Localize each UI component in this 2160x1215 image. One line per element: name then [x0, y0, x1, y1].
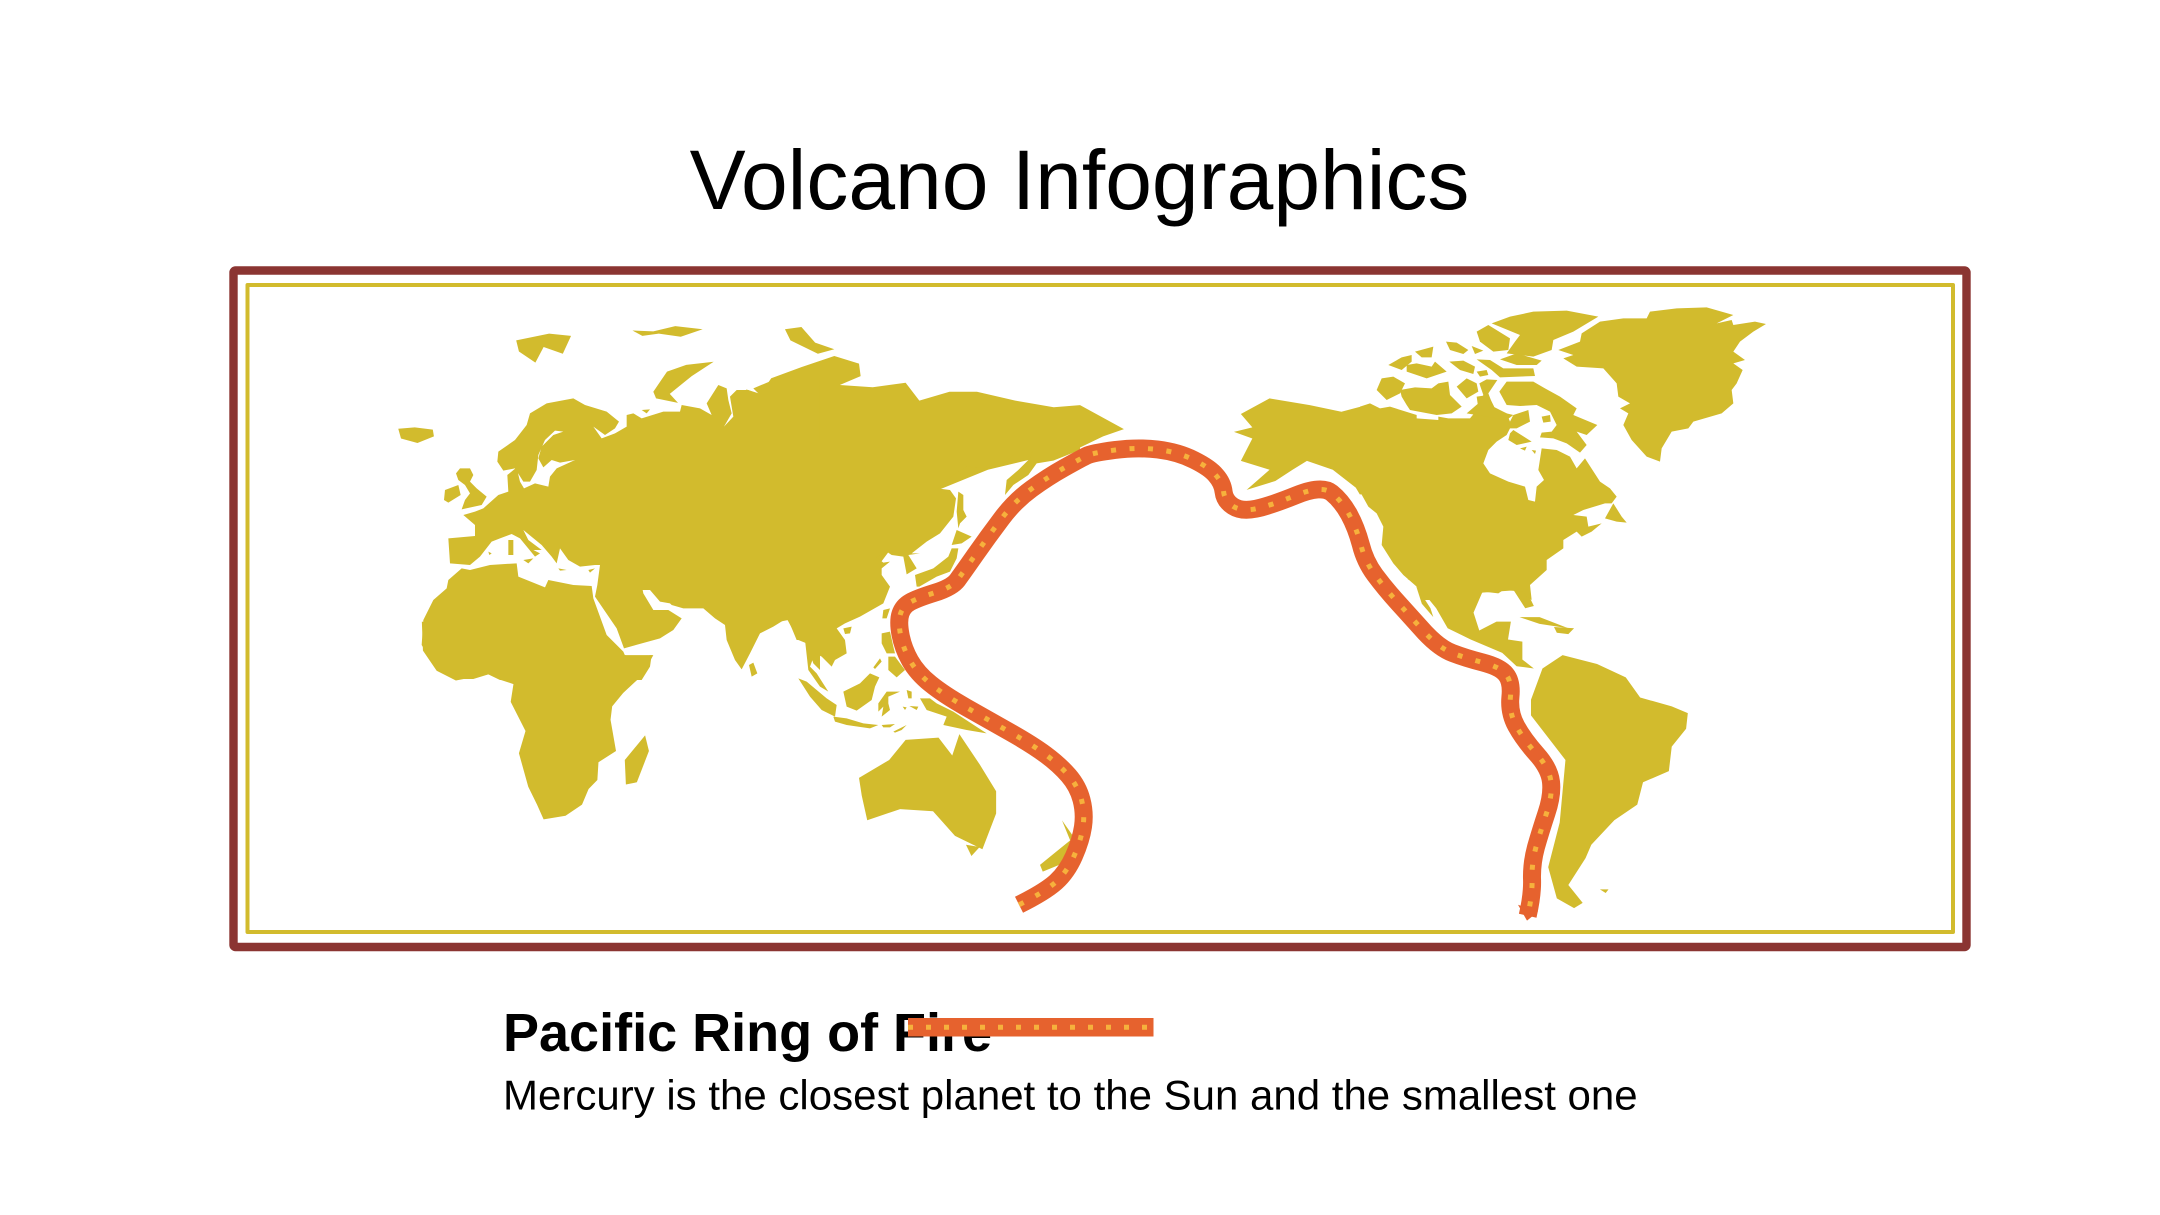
- panel: map frame: [234, 270, 1966, 947]
- Europe, western Asia and north Africa: [422, 380, 820, 680]
- Canada, Arctic islands and Greenland: [1360, 307, 1766, 600]
- legend swatch: ring line: [908, 1018, 1154, 1036]
- Alaska, Central America and South America: [1234, 398, 1688, 908]
- legend description: Mercury is the closest planet to the Sun and the smallest one: [503, 1072, 1638, 1118]
- world map: Europe, Asia, Africa and Oceania: [398, 326, 1124, 872]
- East Asia and Indonesia: [780, 440, 1080, 733]
- Pacific Ring of Fire line: [899, 448, 1551, 921]
- legend heading: Pacific Ring of Fire: [503, 1003, 992, 1063]
- world map: the Americas and Greenland: [1234, 307, 1766, 908]
- title: Volcano Infographics: [690, 133, 1469, 227]
- Arctic Eurasia, south Africa, Australia and outlying islands: [398, 326, 1124, 872]
